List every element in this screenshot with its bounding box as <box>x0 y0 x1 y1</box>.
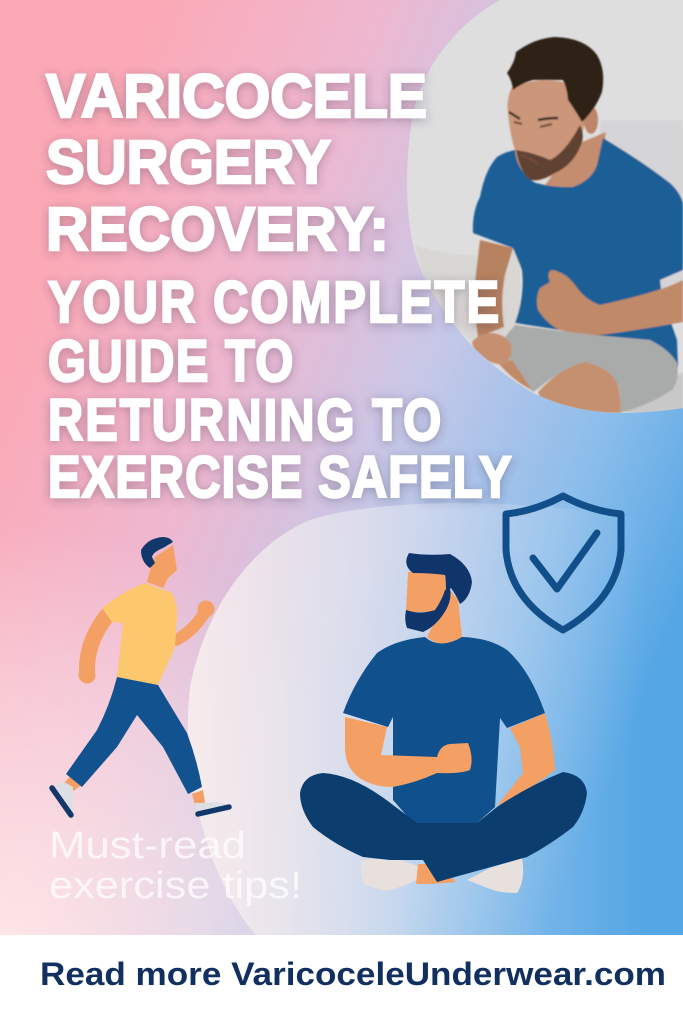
left foot <box>361 858 418 891</box>
tagline: Must-read <box>49 825 246 867</box>
forearm and hand <box>537 270 683 335</box>
footer band <box>0 935 683 1024</box>
eyebrows <box>509 112 558 120</box>
shirt <box>102 583 177 685</box>
title <box>46 62 512 510</box>
neck <box>427 590 462 644</box>
mouth <box>521 155 538 164</box>
tagline <box>49 825 302 907</box>
head and neck <box>147 545 177 588</box>
sofa <box>415 120 683 413</box>
left arm <box>475 240 513 337</box>
front hand <box>198 600 214 618</box>
front arm <box>176 610 206 640</box>
back hand <box>78 666 96 684</box>
hand on knee <box>472 333 511 365</box>
title: RETURNING TO <box>48 389 441 453</box>
front sole <box>198 807 229 814</box>
hair <box>507 37 603 122</box>
icon: shield with check <box>506 496 621 630</box>
runner illustration <box>52 537 230 815</box>
beard <box>516 125 583 180</box>
thigh <box>538 362 621 413</box>
title: YOUR COMPLETE <box>48 271 499 335</box>
seated man illustration <box>300 553 587 893</box>
title: RECOVERY: <box>46 195 389 263</box>
ear <box>584 106 598 134</box>
footer link text: Read more VaricoceleUnderwear.com <box>40 956 666 992</box>
back arm <box>87 612 110 672</box>
title: VARICOCELE <box>46 62 427 130</box>
shorts <box>505 325 678 413</box>
ankle <box>416 864 456 884</box>
front shoe <box>195 802 230 812</box>
beard <box>405 588 451 632</box>
knee <box>498 360 532 390</box>
title: SURGERY <box>46 128 331 196</box>
neck <box>545 132 606 192</box>
shirt <box>473 138 683 367</box>
eye shadow <box>514 122 552 127</box>
title: EXERCISE SAFELY <box>48 446 512 510</box>
photo: man holding abdomen in circle <box>400 0 683 420</box>
right foot <box>467 858 523 893</box>
shirt <box>343 637 545 823</box>
back shoe <box>55 782 73 815</box>
ankles <box>64 770 205 805</box>
left arm <box>345 717 472 787</box>
back sole <box>52 788 71 815</box>
right arm <box>497 713 555 806</box>
hair <box>141 537 173 568</box>
background curve panel <box>188 503 645 935</box>
face <box>508 80 586 180</box>
crossed legs <box>300 772 587 882</box>
pants <box>66 677 202 794</box>
title: GUIDE TO <box>48 330 293 394</box>
face <box>406 570 447 612</box>
hair <box>406 553 472 604</box>
tagline: exercise tips! <box>49 865 302 907</box>
